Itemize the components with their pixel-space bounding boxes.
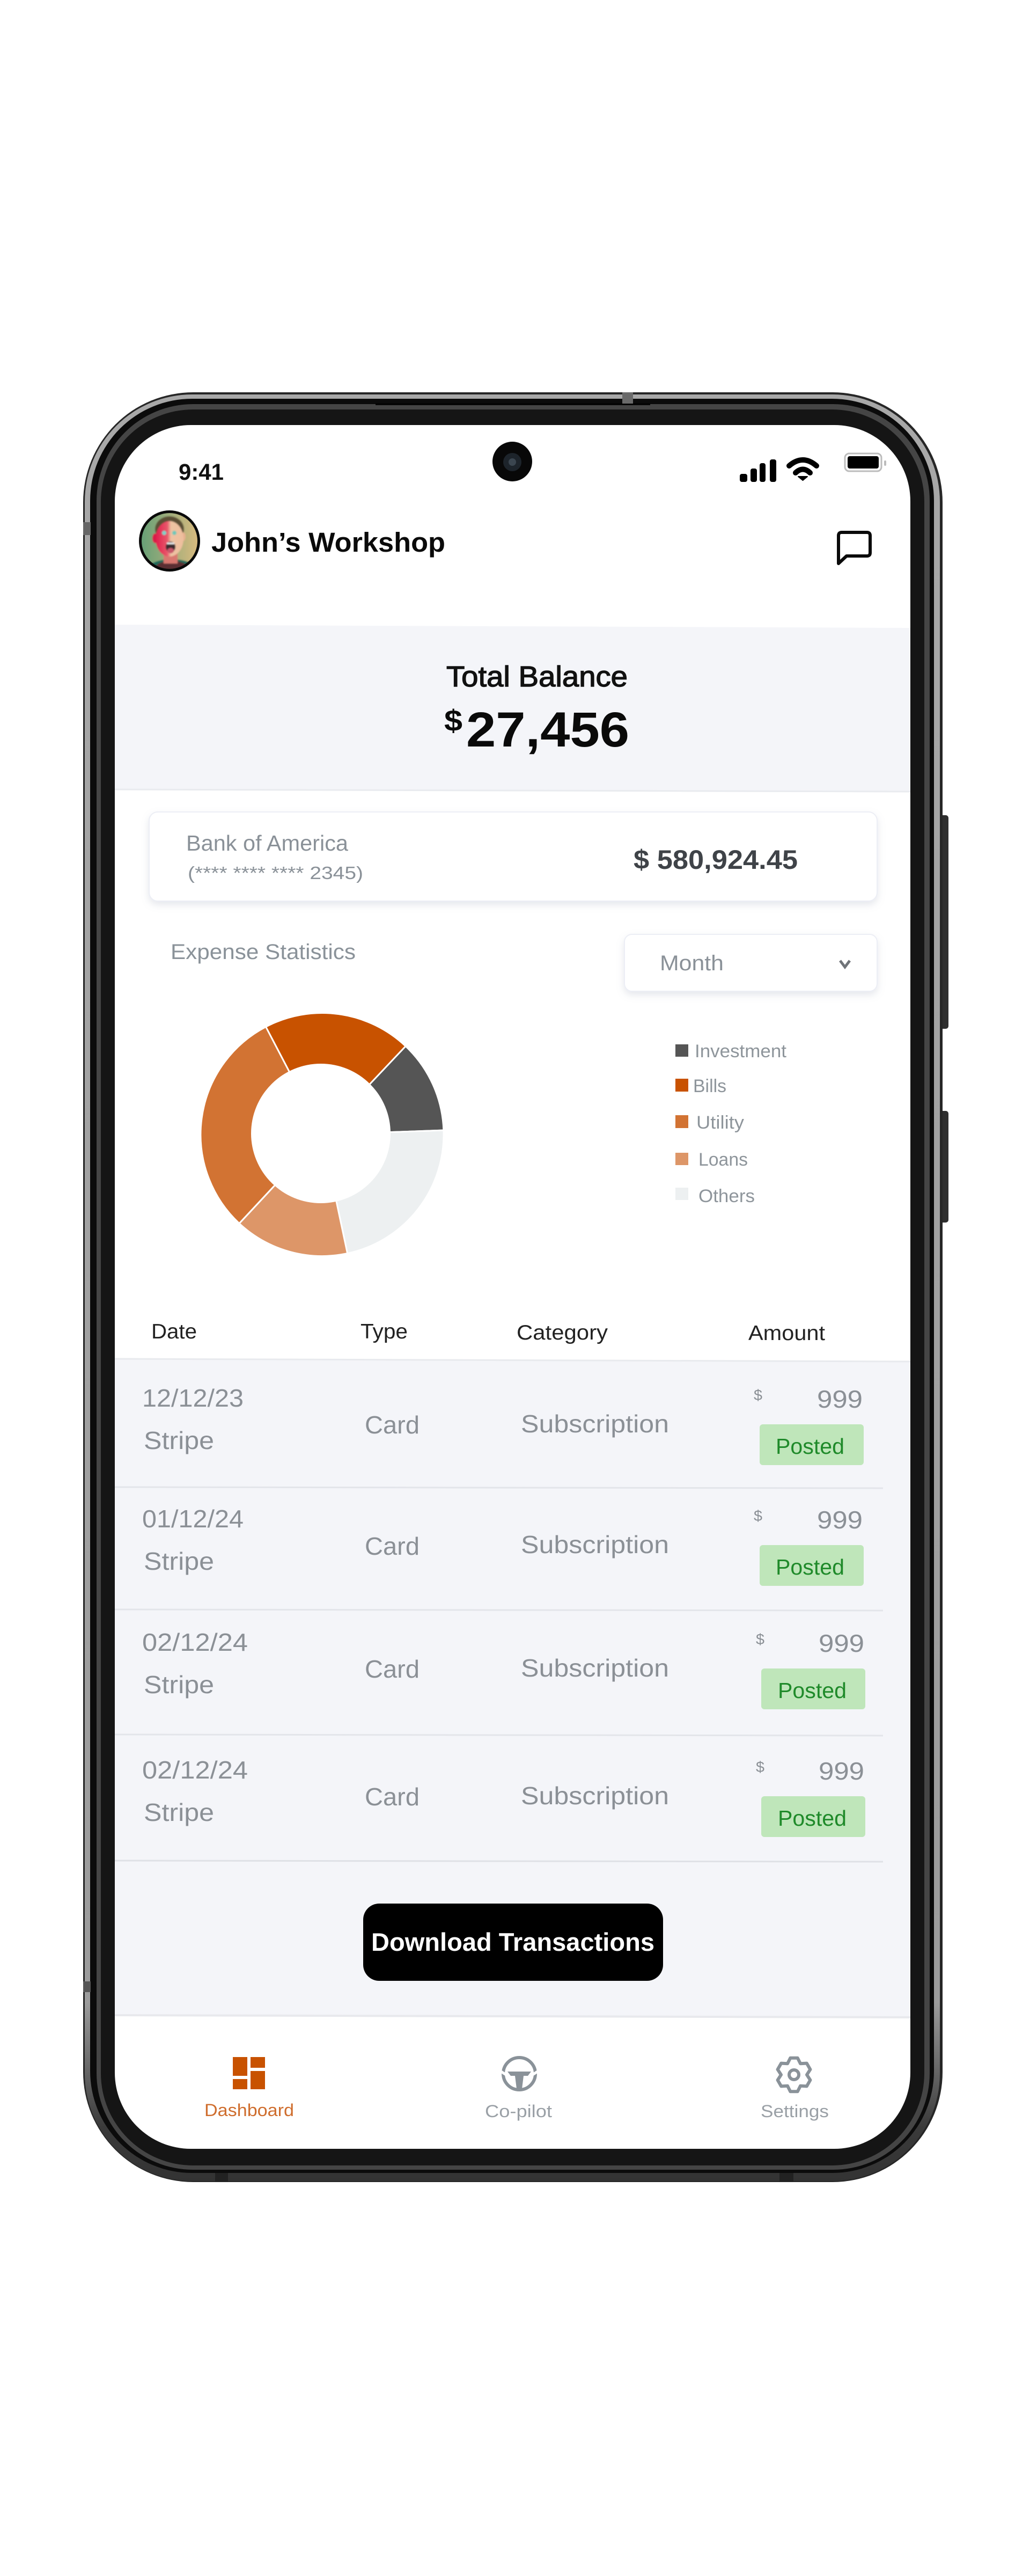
heading: workshop name: John’s Workshop bbox=[211, 527, 445, 558]
icon: steering wheel bbox=[501, 2058, 538, 2090]
transaction row 1: Card bbox=[365, 1411, 420, 1439]
transaction row 4: Card bbox=[365, 1783, 420, 1811]
transaction row 1: Stripe bbox=[144, 1426, 214, 1454]
table header: Type bbox=[360, 1320, 408, 1343]
download button: Download Transactions bbox=[371, 1928, 654, 1956]
camera bbox=[492, 442, 532, 481]
table header bbox=[151, 1320, 825, 1345]
transaction row 1: $ bbox=[754, 1387, 762, 1403]
transaction row 3: Subscription bbox=[521, 1654, 669, 1682]
chart legend: Bills bbox=[693, 1076, 726, 1096]
transaction row 1: Subscription bbox=[521, 1410, 669, 1438]
icon: gear bbox=[778, 2058, 810, 2091]
icon: battery bbox=[845, 453, 886, 471]
transaction row 3 bbox=[115, 1628, 883, 1736]
total balance label: Total Balance bbox=[446, 661, 628, 693]
transaction row 2: Subscription bbox=[521, 1531, 669, 1558]
transaction row 3: Stripe bbox=[144, 1671, 214, 1699]
card number: (**** **** **** 2345) bbox=[188, 863, 363, 883]
transaction row 4: Subscription bbox=[521, 1782, 669, 1810]
transaction row 3: Posted bbox=[778, 1678, 847, 1703]
download button bbox=[363, 1904, 663, 1981]
table header: Amount bbox=[748, 1322, 825, 1345]
transaction row 4: 02/12/24 bbox=[142, 1756, 248, 1784]
total balance amount: 27,456 bbox=[466, 702, 629, 757]
nav item: settings bbox=[761, 2058, 829, 2121]
phone mockup bbox=[83, 392, 948, 2182]
transaction row 2: Posted bbox=[776, 1555, 844, 1579]
month dropdown: Month bbox=[660, 952, 724, 975]
nav item: dashboard: Dashboard bbox=[204, 2101, 294, 2120]
icon: signal bbox=[740, 459, 776, 482]
screen bbox=[115, 425, 910, 2149]
transaction row 2: $ bbox=[754, 1507, 762, 1524]
transaction row 2: 999 bbox=[817, 1506, 863, 1534]
transaction row 3: 999 bbox=[819, 1629, 864, 1657]
nav item: settings: Settings bbox=[761, 2102, 829, 2121]
chart legend: Others bbox=[698, 1186, 755, 1206]
transaction row 1: 12/12/23 bbox=[142, 1384, 244, 1412]
transaction row 4: 999 bbox=[819, 1757, 864, 1785]
transaction row 3: 02/12/24 bbox=[142, 1628, 248, 1656]
panel: bank account card bbox=[149, 812, 877, 901]
icon: dashboard bbox=[233, 2057, 265, 2089]
account balance: $ 580,924.45 bbox=[634, 845, 798, 875]
chart legend: Investment bbox=[695, 1041, 787, 1062]
transaction row 2 bbox=[115, 1505, 883, 1611]
transaction row 4: Stripe bbox=[144, 1798, 214, 1826]
avatar bbox=[139, 510, 200, 572]
nav item: dashboard bbox=[204, 2057, 294, 2120]
transaction row 3: Card bbox=[365, 1655, 420, 1683]
table header: Category bbox=[517, 1321, 608, 1344]
nav item: co-pilot: Co-pilot bbox=[485, 2102, 552, 2121]
transaction row 4 bbox=[115, 1756, 883, 1862]
panel: transactions background bbox=[115, 1358, 910, 2017]
panel: total balance background bbox=[115, 625, 910, 792]
icon: chat bubble bbox=[838, 532, 870, 564]
phone frame bbox=[83, 392, 943, 2182]
donut chart bbox=[201, 1013, 444, 1256]
transaction row 4: $ bbox=[756, 1759, 764, 1775]
transaction row 1: 999 bbox=[817, 1385, 863, 1413]
bank name: Bank of America bbox=[186, 831, 348, 855]
transaction row 2: Stripe bbox=[144, 1547, 214, 1575]
status bar time: 9:41 bbox=[179, 459, 224, 485]
table header: Date bbox=[151, 1320, 197, 1343]
chart legend: Loans bbox=[698, 1150, 748, 1170]
chart legend bbox=[675, 1041, 787, 1206]
nav item: co-pilot bbox=[485, 2058, 552, 2121]
transaction row 4: Posted bbox=[778, 1806, 847, 1831]
transaction row 1: Posted bbox=[776, 1434, 844, 1459]
icon: wifi bbox=[789, 460, 816, 480]
transaction row 2: Card bbox=[365, 1532, 420, 1560]
chart legend: Utility bbox=[696, 1113, 744, 1133]
transaction row 1 bbox=[115, 1384, 883, 1488]
transaction row 3: $ bbox=[756, 1631, 764, 1648]
total balance amount: $ bbox=[444, 704, 462, 737]
month dropdown bbox=[624, 934, 877, 991]
transaction row 2: 01/12/24 bbox=[142, 1505, 244, 1533]
side buttons bbox=[939, 815, 948, 1223]
expense statistics heading: Expense Statistics bbox=[171, 940, 356, 964]
